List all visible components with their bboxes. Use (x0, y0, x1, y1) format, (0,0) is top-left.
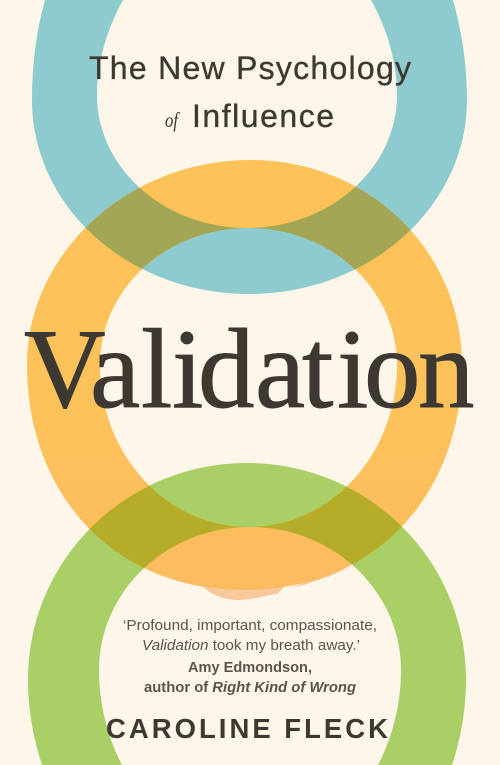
orange and green overlap (90, 486, 402, 568)
blue and orange overlap (86, 186, 410, 270)
orange brush tail (203, 566, 352, 600)
endorsement quote (123, 618, 377, 696)
title: Validation (24, 307, 474, 432)
endorsement quote: ‘Profound, important, compassionate, (123, 618, 377, 634)
green ring (28, 463, 466, 765)
subtitle (89, 50, 411, 134)
author name: CAROLINE FLECK (106, 713, 388, 744)
subtitle: The New Psychology (89, 50, 411, 86)
endorsement quote: author of Right Kind of Wrong (144, 680, 356, 696)
subtitle: Influence (192, 98, 334, 134)
endorsement quote: Amy Edmondson, (188, 660, 312, 676)
blue ring (32, 0, 467, 294)
endorsement quote: Validation took my breath away.’ (142, 638, 360, 654)
orange ring (27, 160, 462, 590)
subtitle: of (165, 108, 181, 132)
